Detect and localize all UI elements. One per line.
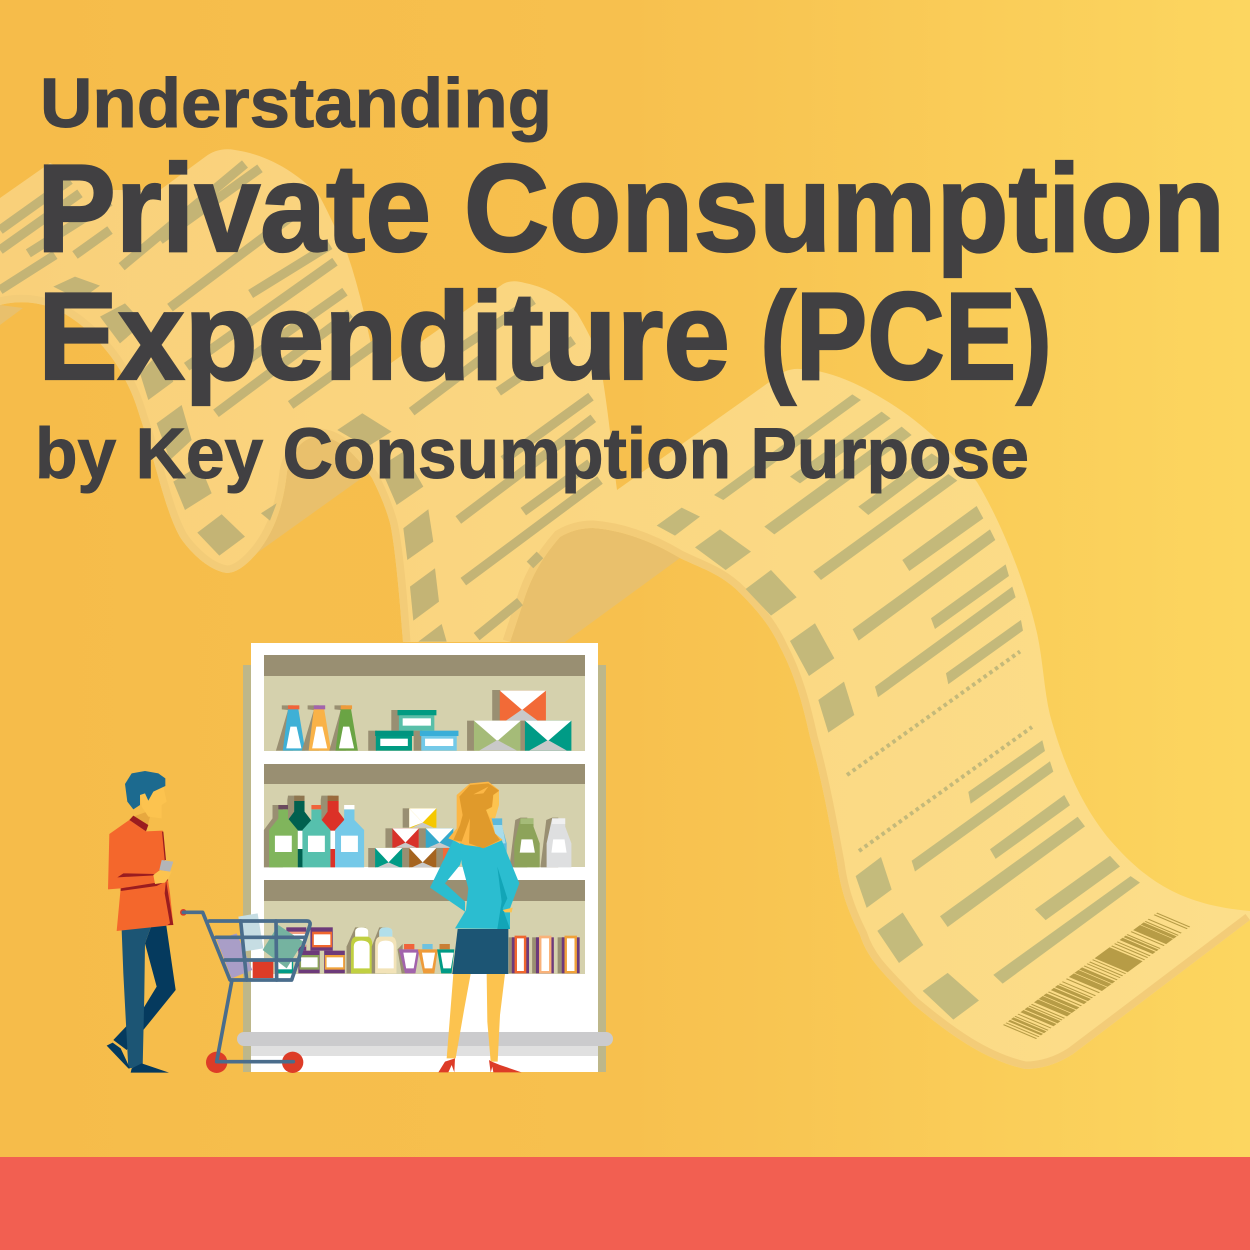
man's back leg [113,923,176,1050]
woman's hand [503,908,513,912]
receipt dotted separators [847,652,1032,851]
woman's legs [447,974,505,1062]
bottom shelf books [509,936,580,973]
shelf side shadow [243,665,606,1072]
man's hair [125,771,165,809]
barcode [1020,919,1175,1032]
receipt underside shadows [0,305,680,642]
bottom shelf tubes [398,944,454,973]
footer band [0,1157,1250,1250]
man's front leg [122,925,152,1068]
shelf unit [237,643,613,1072]
top shelf boxes [368,710,458,751]
phone [159,860,173,872]
receipt lines, bottom section [856,740,1140,1020]
receipt ribbon [0,149,1250,1069]
top shelf envelopes [467,690,571,751]
receipt lines, first fold [0,164,392,556]
shelf base rail [237,1032,613,1056]
man's shirt [108,820,173,931]
woman shopper [430,782,522,1073]
cart wheels [180,909,303,1073]
receipt paper [0,149,1250,1069]
receipt lines, second fold [380,300,600,642]
man's neck and face [133,787,167,830]
shelf bays [264,655,585,974]
receipt edge shading [0,302,1250,1069]
title line 1: Understanding [40,64,552,142]
woman's skirt [452,929,508,974]
cart contents [217,913,303,978]
man's shirt folds [117,816,173,925]
title line 3: Expenditure [38,268,730,406]
woman's jacket [430,840,519,929]
title [35,64,1225,494]
bottom shelf bottles [347,927,396,973]
woman's hair [448,782,503,848]
shopping cart [180,909,310,1073]
man shopper [107,771,176,1073]
top shelf flasks [276,705,358,751]
woman's face [486,792,499,818]
middle shelf cartons [491,818,571,867]
shelf products [264,690,580,973]
title line 4: by Key Consumption Purpose [35,415,1029,494]
middle shelf small envelopes [368,808,457,867]
man's shoes [107,1043,169,1073]
bottom shelf jars [276,927,345,973]
middle shelf bottles [264,796,364,867]
title line 2: Private Consumption [37,140,1225,278]
receipt lines, third fold [657,394,1023,733]
man's hand [153,870,172,884]
title line 3: (PCE) [760,268,1052,406]
shelf frame [251,643,598,1072]
cart frame [183,912,310,1062]
woman's shoes [438,1058,522,1073]
